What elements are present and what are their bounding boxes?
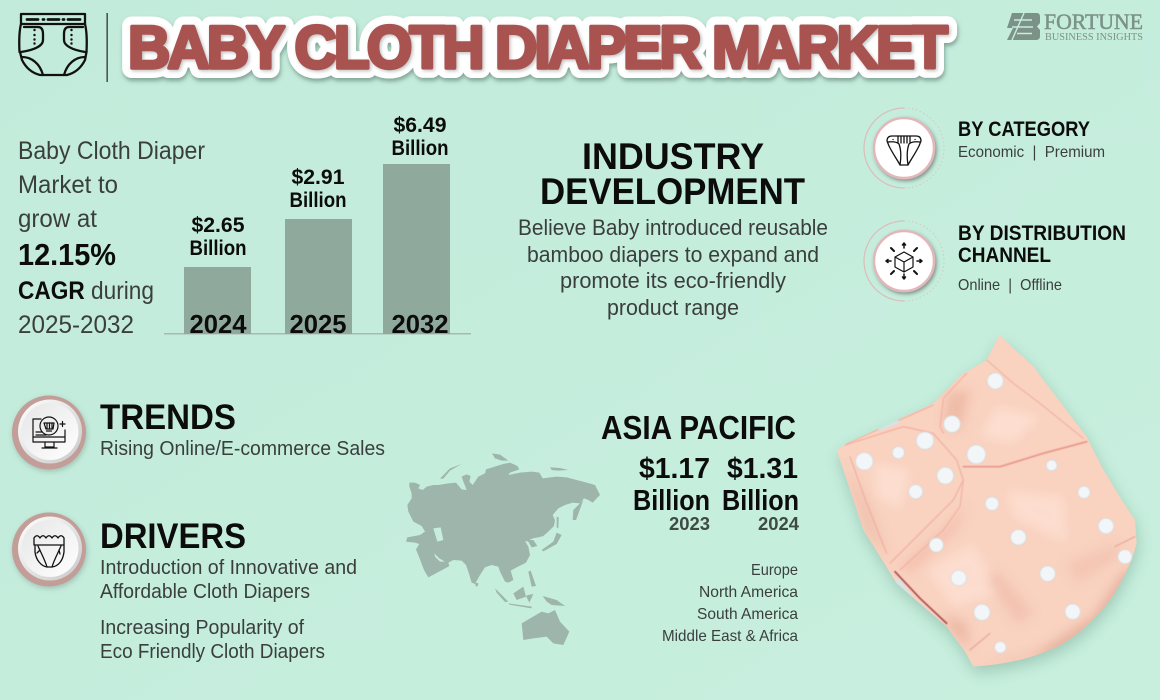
image: pink cloth diaper <box>837 335 1138 673</box>
text: by distribution channel: BY DISTRIBUTION <box>958 222 1126 245</box>
bar 2024: 2024 <box>190 311 247 339</box>
title: BABY CLOTH DIAPER MARKET <box>128 14 947 81</box>
text: market growth statement: Baby Cloth Diaper <box>18 137 205 165</box>
icon: by category <box>864 108 944 188</box>
text: Asia Pacific figures: $1.31 <box>727 453 798 485</box>
text: industry development body <box>518 215 828 320</box>
bar 2025: 2025 <box>290 311 346 339</box>
bar 2024: Billion <box>190 237 246 260</box>
text: by category: Economic | Premium <box>958 144 1105 161</box>
heading: industry development: INDUSTRY <box>582 136 764 177</box>
text: trends: TRENDS <box>100 398 236 437</box>
icon: drivers <box>12 512 86 586</box>
logo: Fortune Business Insights: FORTUNE <box>1044 9 1143 34</box>
text: by category <box>958 118 1105 161</box>
icon: diaper logo <box>19 14 87 75</box>
title: BABY CLOTH DIAPER MARKET <box>128 14 947 81</box>
bar 2032 <box>383 114 450 339</box>
text: drivers: DRIVERS <box>100 517 246 556</box>
text: industry development body: Believe Baby introduced reusable <box>518 215 828 240</box>
text: trends: Rising Online/E-commerce Sales <box>100 438 385 460</box>
bar 2025: Billion <box>290 189 346 212</box>
map: Asia Pacific <box>406 453 600 645</box>
text: drivers: Introduction of Innovative and <box>100 557 357 579</box>
text: drivers: Increasing Popularity of <box>100 617 304 639</box>
text: Asia Pacific figures <box>601 409 799 534</box>
bar 2032: $6.49 <box>394 114 446 137</box>
logo: Fortune Business Insights: BUSINESS INSIGHTS <box>1045 32 1143 43</box>
text: drivers: Affordable Cloth Diapers <box>100 581 310 603</box>
text: Asia Pacific figures: Billion <box>722 485 799 517</box>
text: drivers: Eco Friendly Cloth Diapers <box>100 641 325 663</box>
bar 2032: 2032 <box>392 311 448 339</box>
text: other regions: Europe <box>751 562 798 579</box>
text: Asia Pacific figures: $1.17 <box>639 453 710 485</box>
text: market growth statement <box>18 137 205 339</box>
bar chart: market size <box>164 114 471 339</box>
text: by category: BY CATEGORY <box>958 118 1090 141</box>
text: by distribution channel: CHANNEL <box>958 244 1051 267</box>
text: other regions <box>662 562 798 645</box>
bar 2024: $2.65 <box>192 214 245 237</box>
icon: trends <box>12 396 86 470</box>
text: by distribution channel <box>958 222 1126 294</box>
text: other regions: South America <box>697 606 798 623</box>
bar 2025: $2.91 <box>292 166 345 189</box>
text: Asia Pacific figures: 2023 <box>669 514 710 534</box>
text: market growth statement: CAGR during <box>18 277 154 305</box>
text: market growth statement: Market to <box>18 171 118 199</box>
text: industry development body: promote its eco-friendly <box>560 268 786 293</box>
icon: by distribution channel <box>864 221 944 301</box>
text: industry development body: bamboo diapers to expand and <box>527 242 819 267</box>
text: Asia Pacific figures: 2024 <box>758 514 799 534</box>
text: industry development body: product range <box>607 295 739 320</box>
text: by distribution channel: Online | Offline <box>958 277 1062 294</box>
snaps <box>856 373 1132 653</box>
text: other regions: Middle East & Africa <box>662 628 798 645</box>
bar 2024 <box>184 214 251 339</box>
text: Asia Pacific figures: Billion <box>633 485 710 517</box>
text: Asia Pacific figures: ASIA PACIFIC <box>601 409 796 446</box>
text: trends <box>100 398 385 460</box>
bar 2032: Billion <box>392 137 448 160</box>
text: market growth statement: 12.15% <box>18 237 116 272</box>
heading: industry development <box>540 136 805 212</box>
text: other regions: North America <box>699 584 798 601</box>
text: drivers <box>100 517 357 663</box>
divider <box>106 13 108 82</box>
bar 2025 <box>285 166 352 339</box>
heading: industry development: DEVELOPMENT <box>540 171 805 212</box>
logo: Fortune Business Insights <box>1007 9 1143 43</box>
text: market growth statement: 2025-2032 <box>18 311 134 339</box>
text: market growth statement: grow at <box>18 205 97 233</box>
